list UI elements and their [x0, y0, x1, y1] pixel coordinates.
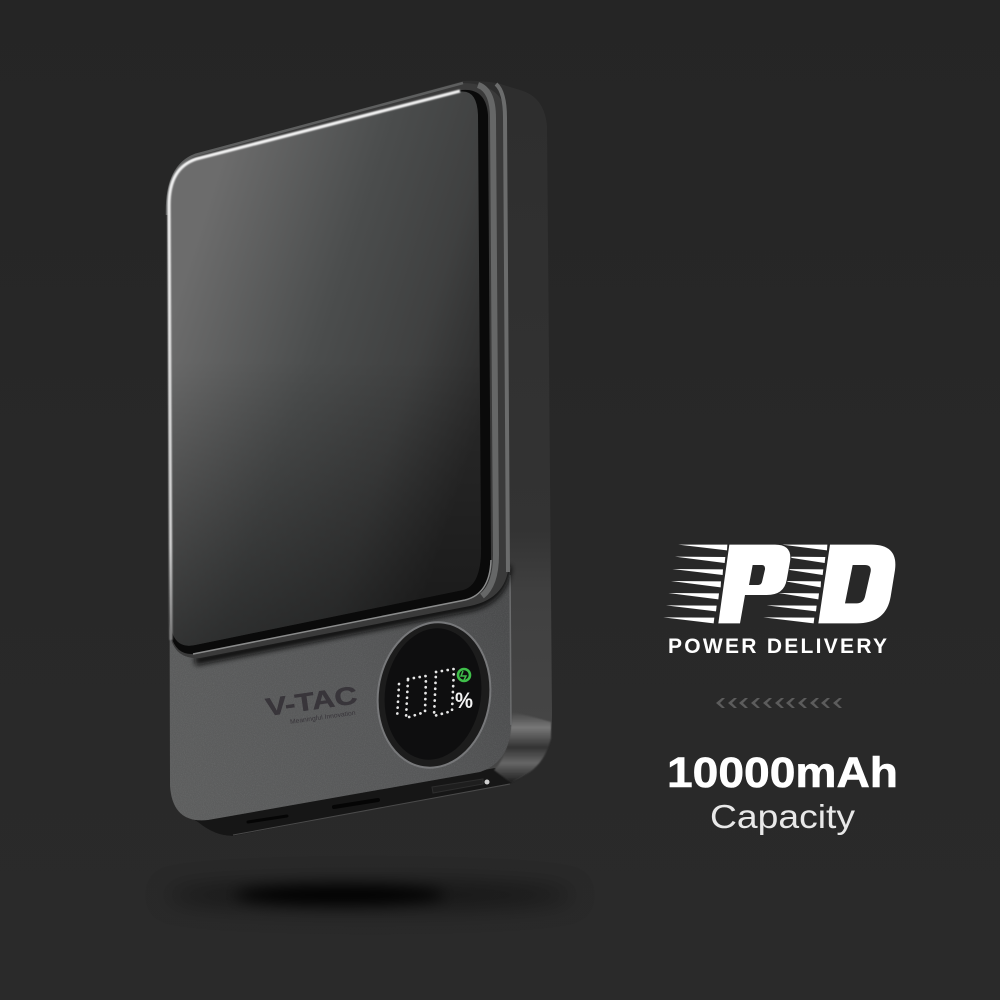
chevron divider [716, 698, 842, 708]
POWER DELIVERY label: POWER DELIVERY [668, 635, 887, 658]
glass edge highlight [169, 91, 460, 640]
display bezel [368, 615, 500, 775]
shadow around glass module [195, 566, 507, 661]
groove around glass [169, 90, 491, 654]
charging icon [458, 669, 470, 681]
floor shadow [165, 882, 575, 908]
tagline: Meaningful Innovation [290, 710, 356, 726]
USB port 2 [334, 800, 378, 807]
display screen [376, 622, 490, 766]
device body [167, 81, 552, 836]
glass panel [169, 91, 481, 646]
speed stripes [663, 545, 827, 623]
percent sign: % [455, 688, 473, 713]
metal plate [170, 560, 511, 820]
button slot [432, 779, 483, 793]
capacity label: Capacity [710, 798, 856, 835]
side rings [478, 84, 508, 596]
rim line [193, 560, 491, 654]
bottom face [170, 768, 512, 836]
plate seam [510, 575, 511, 725]
bottom edge line [233, 784, 510, 835]
corner highlight [494, 712, 551, 783]
raised module [167, 83, 509, 658]
capacity value: 10000mAh [667, 749, 898, 797]
letter D [818, 545, 895, 623]
PD logo [663, 545, 895, 623]
LED display [368, 615, 500, 775]
indicator light [484, 780, 490, 784]
letter P [718, 545, 790, 623]
glass shade [169, 91, 481, 646]
power bank device [167, 81, 552, 836]
USB port 1 [248, 816, 287, 822]
plate grain [170, 560, 511, 820]
V-TAC wordmark: V-TAC [264, 681, 359, 722]
brand logo [264, 681, 360, 729]
digits 100 [397, 669, 454, 719]
top outer rim [167, 83, 463, 215]
